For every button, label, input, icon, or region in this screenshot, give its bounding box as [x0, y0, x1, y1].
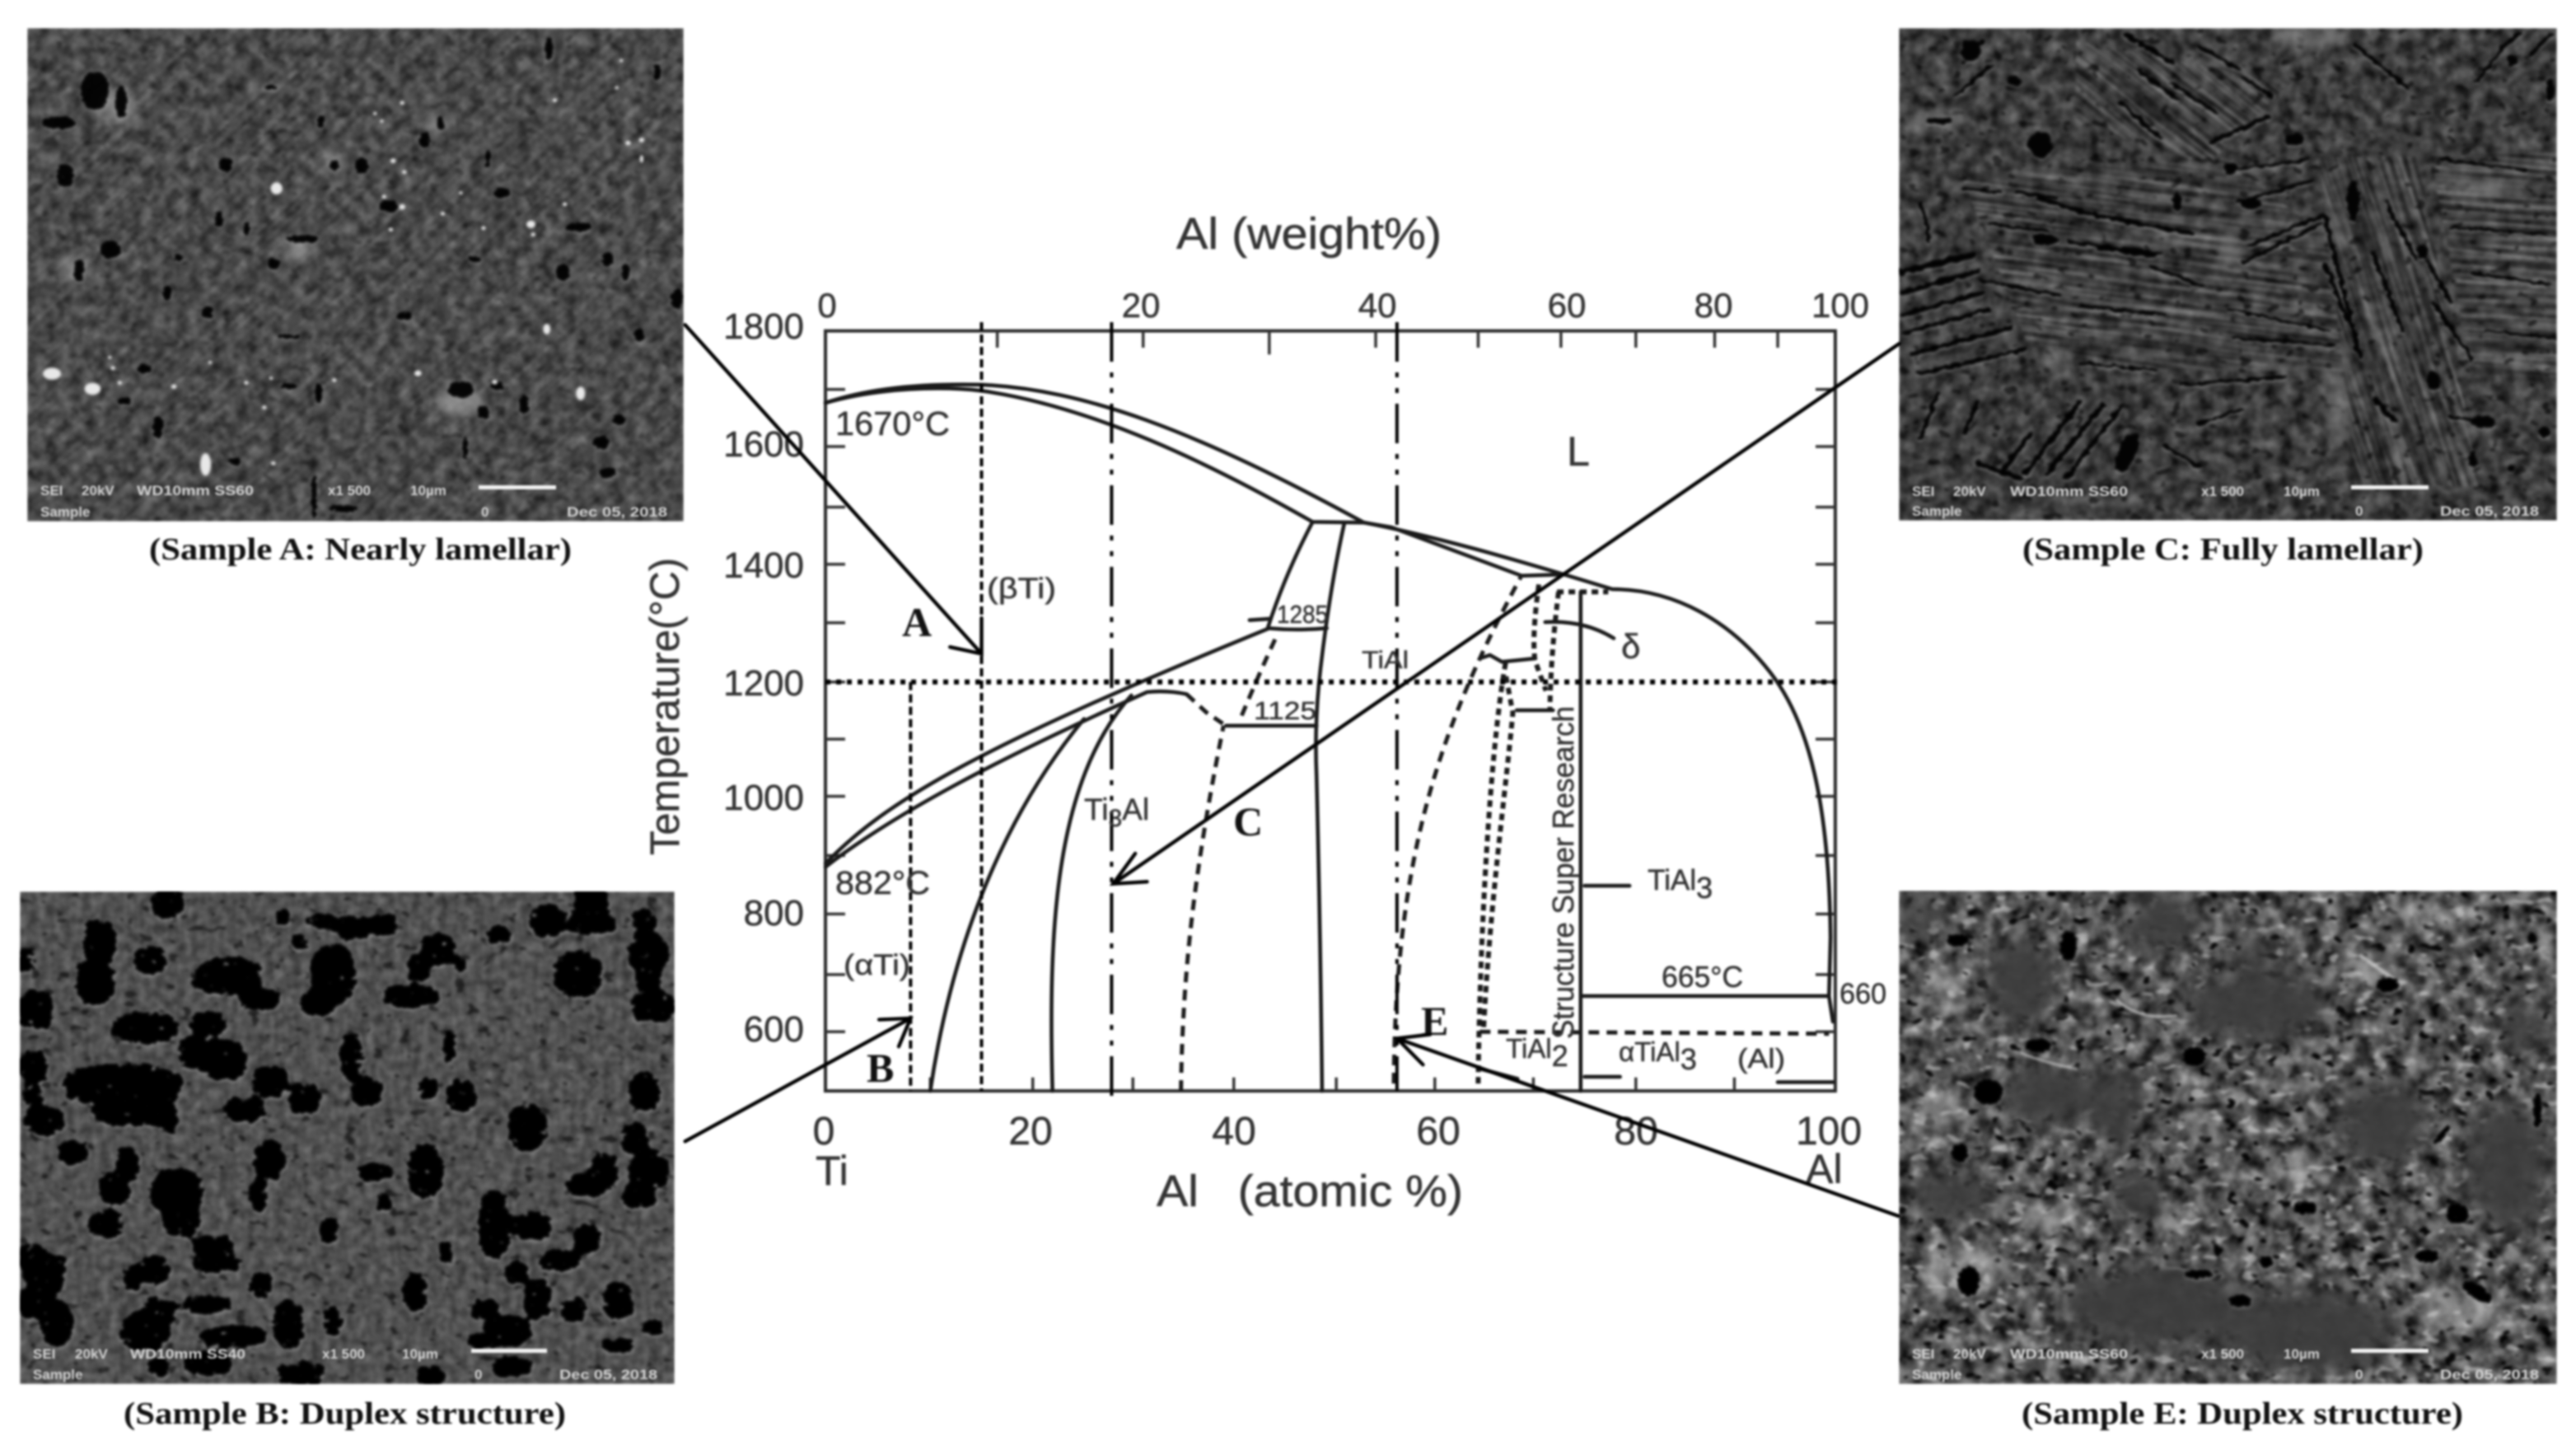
SEM info labels: x1 500	[328, 483, 371, 498]
phase and temperature labels: 2	[1552, 1039, 1569, 1073]
phase and temperature labels: 1285	[1277, 600, 1328, 629]
axis end labels Ti and Al: Ti	[816, 1148, 849, 1194]
arrow: Sample E to diagram	[1397, 1035, 1898, 1216]
phase and temperature labels: (Al)	[1737, 1043, 1785, 1074]
scale bar	[2351, 1349, 2429, 1353]
left axis tick labels: 1800	[723, 306, 804, 347]
phase and temperature labels: TiAl	[1506, 1033, 1552, 1064]
SEM info labels: SEI	[33, 1346, 55, 1362]
SEM info labels: Sample	[1912, 1367, 1961, 1383]
phase and temperature labels: 1670°C	[835, 405, 950, 442]
phase and temperature labels	[835, 405, 1886, 1076]
SEM info labels	[1912, 484, 2539, 519]
phase and temperature labels: L	[1567, 428, 1590, 475]
SEM info labels: WD10mm SS60	[2010, 484, 2128, 499]
phase boundary curves and frame	[825, 331, 1835, 1091]
reference lines for samples and 1200C isotherm	[825, 322, 1842, 1101]
SEM info labels: x1 500	[322, 1346, 365, 1362]
SEM info labels	[1912, 1346, 2539, 1383]
phase and temperature labels: Structure Super Research	[1546, 706, 1580, 1039]
SEM info labels: x1 500	[2201, 1346, 2244, 1362]
phase and temperature labels: αTiAl	[1619, 1036, 1681, 1067]
sample position letters	[867, 599, 1448, 1091]
SEM info labels: SEI	[1912, 1346, 1934, 1362]
SEM info labels: 10µm	[402, 1346, 438, 1362]
axis end labels Ti and Al: Al	[1806, 1146, 1842, 1192]
phase and temperature labels: TiAl	[1648, 864, 1696, 896]
caption: Sample E: (Sample E: Duplex structure)	[2022, 1397, 2463, 1431]
SEM info labels: 0	[481, 504, 489, 520]
bottom axis tick labels: 40	[1212, 1110, 1256, 1153]
top axis tick labels: 80	[1695, 286, 1732, 325]
SEM info labels: WD10mm SS60	[137, 483, 254, 498]
phase and temperature labels: 665°C	[1662, 960, 1743, 994]
SEM info labels: x1 500	[2201, 484, 2244, 499]
sample position letters: B	[867, 1045, 894, 1091]
top axis tick labels: 0	[817, 286, 837, 325]
scale bar	[471, 1349, 547, 1353]
top axis tick labels: 20	[1122, 286, 1160, 325]
bottom axis tick labels: 60	[1416, 1110, 1461, 1153]
bottom axis tick labels: 100	[1796, 1110, 1862, 1153]
left axis tick labels: 1000	[723, 778, 804, 818]
phase and temperature labels: (αTi)	[844, 949, 910, 981]
phase and temperature labels: 660	[1840, 978, 1886, 1010]
bottom axis tick labels: 80	[1614, 1110, 1658, 1153]
SEM info labels: 10µm	[2284, 1346, 2320, 1362]
axis title: temperature: Temperature(°C)	[642, 558, 688, 855]
axis end labels Ti and Al	[816, 1146, 1842, 1194]
SEM info labels: WD10mm SS60	[2010, 1346, 2128, 1362]
top axis tick labels: 100	[1812, 286, 1869, 325]
SEM info labels: 20kV	[82, 483, 115, 498]
SEM info labels: Sample	[1912, 503, 1961, 519]
phase and temperature labels: 882°C	[835, 865, 930, 901]
left axis tick labels: 1200	[723, 663, 804, 704]
phase and temperature labels: Ti	[1084, 793, 1108, 826]
phase and temperature labels: 3	[1681, 1042, 1697, 1076]
SEM info labels: Sample	[33, 1367, 82, 1383]
left axis tick labels: 600	[744, 1009, 804, 1050]
SEM info labels: Dec 05, 2018	[2440, 503, 2539, 519]
phase and temperature labels: Al	[1122, 793, 1149, 826]
scale bar	[479, 485, 556, 489]
arrow: Sample C to diagram	[1113, 344, 1899, 884]
SEM info labels: SEI	[1912, 484, 1934, 499]
sample position letters: E	[1421, 998, 1448, 1044]
bottom axis tick labels: 20	[1008, 1110, 1053, 1153]
SEM info labels: 20kV	[75, 1346, 108, 1362]
SEM info labels: Dec 05, 2018	[2440, 1367, 2539, 1383]
axis title: Al weight percent: Al (weight%)	[1176, 209, 1442, 259]
SEM info labels: SEI	[40, 483, 63, 498]
phase and temperature labels: 3	[1696, 871, 1713, 905]
SEM info labels	[33, 1346, 657, 1383]
top axis tick labels: 40	[1358, 286, 1396, 325]
phase and temperature labels: TiAl	[1362, 647, 1409, 674]
left axis tick labels	[723, 306, 804, 1050]
panel: Sample E SEM micrograph	[1899, 891, 2557, 1384]
left axis tick labels: 800	[744, 893, 804, 933]
bottom axis tick labels	[813, 1110, 1862, 1153]
left axis tick labels: 1600	[723, 424, 804, 465]
SEM info labels: WD10mm SS40	[130, 1346, 245, 1362]
SEM info labels: 20kV	[1953, 1346, 1986, 1362]
panel: Sample B SEM micrograph	[20, 885, 675, 1385]
phase and temperature labels: 1125	[1254, 696, 1316, 725]
SEM info labels	[40, 483, 667, 520]
sample position letters: C	[1233, 798, 1263, 844]
SEM info labels: 0	[2355, 503, 2363, 519]
panel: Sample A SEM micrograph	[26, 26, 685, 523]
arrow: Sample A to diagram	[685, 325, 981, 653]
SEM info labels: 20kV	[1953, 484, 1986, 499]
caption: Sample C: (Sample C: Fully lamellar)	[2022, 532, 2424, 567]
SEM info labels: 0	[2355, 1367, 2363, 1383]
phase and temperature labels: δ	[1621, 627, 1640, 666]
sample position letters: A	[902, 599, 932, 645]
left axis tick labels: 1400	[723, 545, 804, 586]
top axis tick labels: 60	[1548, 286, 1586, 325]
chart: Ti-Al phase diagram	[642, 209, 1886, 1216]
caption: Sample A: (Sample A: Nearly lamellar)	[149, 532, 572, 567]
axis title: Al atomic percent: Al (atomic %)	[1157, 1167, 1463, 1216]
caption: Sample B: (Sample B: Duplex structure)	[124, 1397, 566, 1431]
SEM info labels: Dec 05, 2018	[567, 504, 667, 520]
arrow: Sample B to diagram	[685, 1018, 910, 1141]
SEM info labels: 0	[475, 1367, 482, 1383]
bottom axis tick labels: 0	[813, 1110, 835, 1153]
phase and temperature labels: 3	[1108, 805, 1122, 832]
SEM info labels: 10µm	[2284, 484, 2320, 499]
SEM info labels: Dec 05, 2018	[559, 1367, 657, 1383]
SEM info labels: Sample	[40, 504, 90, 520]
scale bar	[2351, 485, 2429, 489]
SEM info labels: 10µm	[410, 483, 446, 498]
phase and temperature labels: (βTi)	[987, 573, 1056, 605]
top axis tick labels	[817, 286, 1869, 325]
panel: Sample C SEM micrograph	[1897, 26, 2559, 522]
